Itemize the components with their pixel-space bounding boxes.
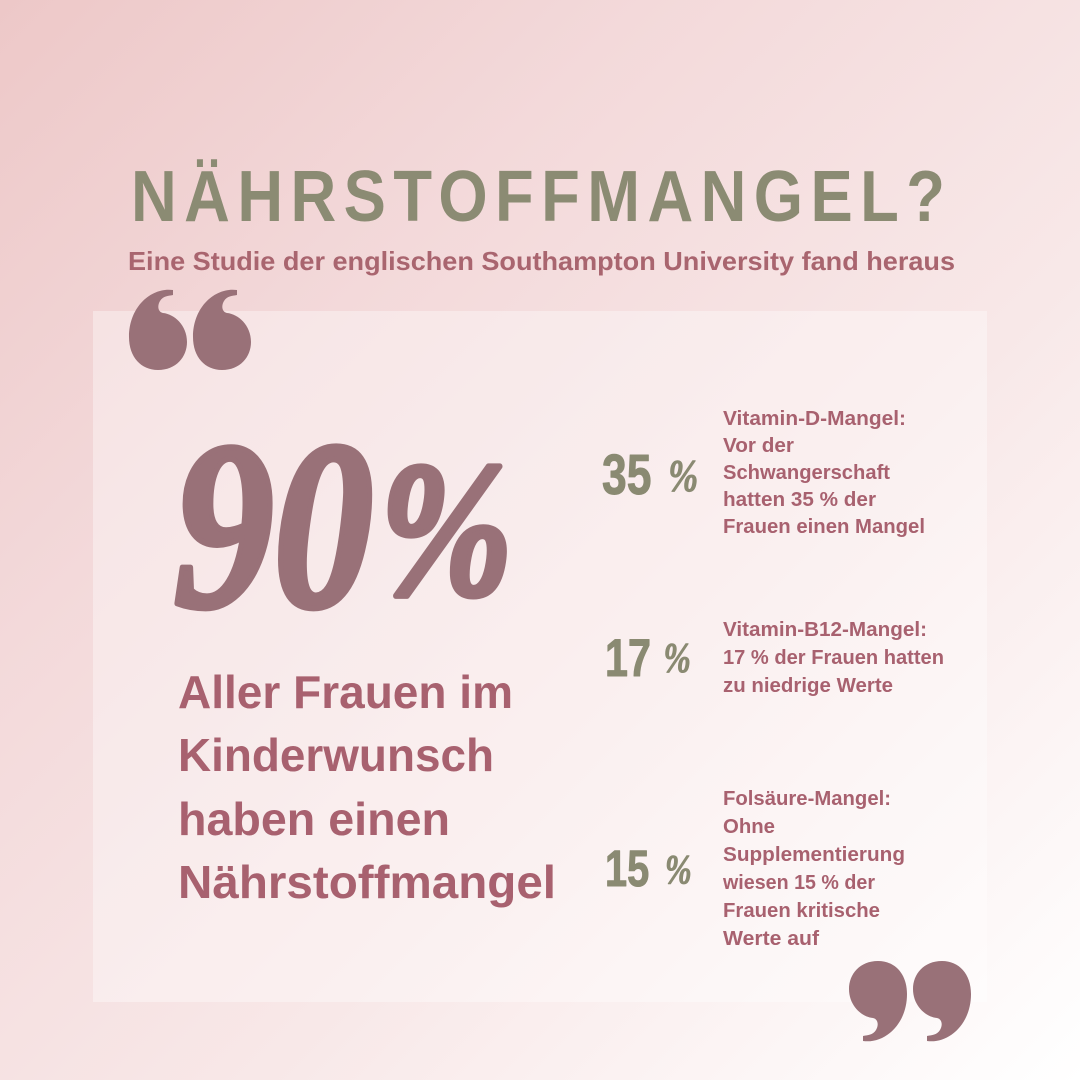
statement: left text block: haben einen bbox=[178, 793, 450, 845]
description: vitamin B12: Vitamin-B12-Mangel: bbox=[723, 619, 927, 641]
stat: 15 %: % bbox=[665, 846, 692, 892]
stat: 15 %: 15 bbox=[605, 840, 649, 897]
stat: 35 %: 35 bbox=[602, 443, 651, 506]
description: folic acid: wiesen 15 % der bbox=[722, 872, 875, 894]
big statistic: 90%: % bbox=[380, 424, 513, 636]
statement: left text block: Kinderwunsch bbox=[178, 729, 494, 781]
stat: 17 %: 17 bbox=[605, 629, 651, 688]
title: NÄHRSTOFFMANGEL? bbox=[131, 157, 945, 237]
icon: closing quotation mark bbox=[849, 961, 971, 1041]
description: vitamin B12 bbox=[723, 619, 944, 697]
statement: left text block bbox=[178, 666, 556, 908]
statement: left text block: Nährstoffmangel bbox=[178, 856, 556, 908]
description: folic acid: Ohne bbox=[723, 816, 775, 838]
description: vitamin D: hatten 35 % der bbox=[723, 489, 876, 511]
description: folic acid: Werte auf bbox=[723, 928, 819, 950]
panel: translucent background bbox=[93, 311, 987, 1002]
description: vitamin D: Vor der bbox=[723, 435, 794, 457]
icon: opening quotation mark bbox=[129, 290, 251, 370]
statement: left text block: Aller Frauen im bbox=[178, 666, 513, 718]
description: vitamin B12: 17 % der Frauen hatten bbox=[723, 647, 944, 669]
subtitle: Eine Studie der englischen Southampton University fand heraus bbox=[128, 246, 955, 276]
big statistic: 90%: 90 bbox=[174, 392, 373, 658]
description: folic acid: Folsäure-Mangel: bbox=[723, 788, 891, 810]
description: vitamin D: Schwangerschaft bbox=[723, 462, 890, 484]
stat: 35 %: % bbox=[668, 450, 698, 501]
description: folic acid bbox=[722, 788, 905, 950]
description: vitamin D: Frauen einen Mangel bbox=[723, 516, 925, 538]
description: folic acid: Supplementierung bbox=[723, 844, 905, 866]
description: vitamin D bbox=[723, 408, 925, 538]
stat: 17 %: % bbox=[663, 635, 691, 682]
description: vitamin D: Vitamin-D-Mangel: bbox=[723, 408, 906, 430]
description: vitamin B12: zu niedrige Werte bbox=[723, 675, 893, 697]
description: folic acid: Frauen kritische bbox=[723, 900, 880, 922]
